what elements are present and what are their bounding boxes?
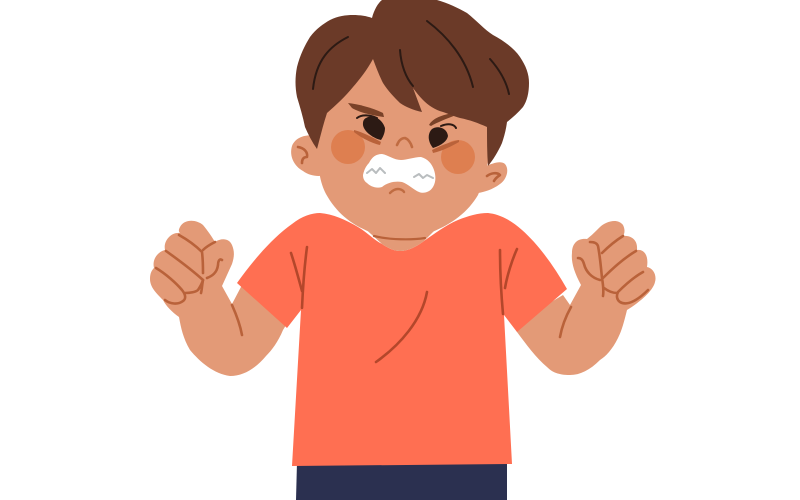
head [315,50,490,239]
right eye [429,113,459,153]
lower lip [390,189,404,193]
left ear [291,135,330,176]
right fist creases [560,236,648,337]
left arm and fist [150,221,288,376]
right arm and fist [514,221,656,375]
shirt [237,213,567,466]
shirt folds [291,247,517,362]
hair strands [313,21,509,94]
teeth marks [367,168,385,173]
mouth [363,154,435,193]
right cheek [441,140,475,174]
left fist creases [156,235,242,335]
hair [296,0,529,166]
neck [350,215,450,251]
chin line [374,236,425,239]
left eye [348,103,385,145]
nose [397,138,412,147]
left cheek [331,130,365,164]
right ear [470,162,507,193]
pants [296,462,507,500]
